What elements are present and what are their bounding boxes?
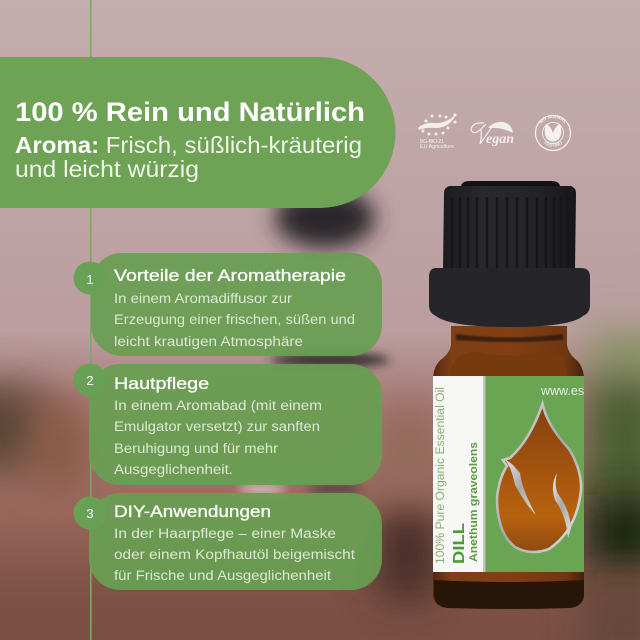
card 1: Vorteile der Aromatherapie [74, 253, 382, 356]
label oil drop [497, 404, 581, 552]
card 1 text [114, 291, 355, 349]
card 1 text: In einem Aromadiffusor zur [114, 291, 293, 306]
card 3 text: In der Haarpflege – einer Maske [114, 526, 336, 541]
aroma description [15, 132, 362, 182]
cap collar [429, 268, 590, 327]
card 3 text: für Frische und Ausgeglichenheit [114, 568, 331, 583]
card 2 text: Beruhigung und für mehr [114, 441, 279, 456]
heading: 100 % Rein und Natürlich [15, 97, 365, 127]
card 2 text: Emulgator versetzt) zur sanften [114, 419, 320, 434]
card 2 heading: Hautpflege [114, 374, 209, 393]
icon: EU organic leaf [418, 114, 456, 150]
card 3: DIY-Anwendungen [74, 493, 382, 590]
product bottle [429, 181, 590, 609]
label white strip [433, 376, 485, 572]
bottle glass body [433, 326, 584, 609]
badge 1 [74, 262, 106, 294]
label green part [485, 376, 584, 572]
icon: EU organic leaf: EU Agriculture [420, 144, 454, 150]
label website: www.ess [540, 384, 590, 398]
vertical timeline line [90, 0, 92, 640]
badge 3: 3 [86, 506, 94, 521]
icon: no animal testing badge: TESTING [544, 140, 562, 147]
badge 2: 2 [86, 373, 94, 388]
icon: no animal testing badge [534, 114, 572, 152]
badge 1: 1 [86, 272, 94, 287]
icon: vegan leaf [471, 122, 514, 147]
badge 3 [74, 496, 106, 530]
icon: EU organic leaf: BG-BIO-21 [420, 139, 444, 145]
label: DILL [451, 523, 468, 564]
card 1 text: Erzeugung einer frischen, süßen und [114, 312, 355, 327]
icon: vegan leaf: egan [486, 132, 514, 147]
aroma description: Aroma: Frisch, süßlich-kräuterig [15, 132, 362, 158]
label product name: 100% Pure Organic Essential Oil [435, 387, 447, 564]
cap top [461, 181, 560, 190]
card 2 text: In einem Aromabad (mit einem [114, 398, 322, 413]
card 2 text: Ausgeglichenheit. [114, 462, 233, 477]
aroma description: und leicht würzig [15, 156, 199, 182]
card 3 text: oder einem Kopfhautöl beigemischt [114, 547, 355, 562]
label [433, 376, 590, 572]
card 1 heading: Vorteile der Aromatherapie [114, 266, 346, 285]
card 3 heading: DIY-Anwendungen [114, 502, 271, 521]
cap ribbed section [443, 186, 576, 270]
icon: no animal testing badge: NO ANIMAL [539, 114, 566, 124]
header panel [0, 57, 396, 208]
badge 2 [74, 364, 106, 396]
card 1 text: leicht krautigen Atmosphäre [114, 334, 303, 349]
card 3 text [114, 526, 355, 583]
card 2 text [114, 398, 322, 477]
card 2: Hautpflege [74, 364, 382, 485]
label: Anethum graveolens [468, 442, 480, 562]
